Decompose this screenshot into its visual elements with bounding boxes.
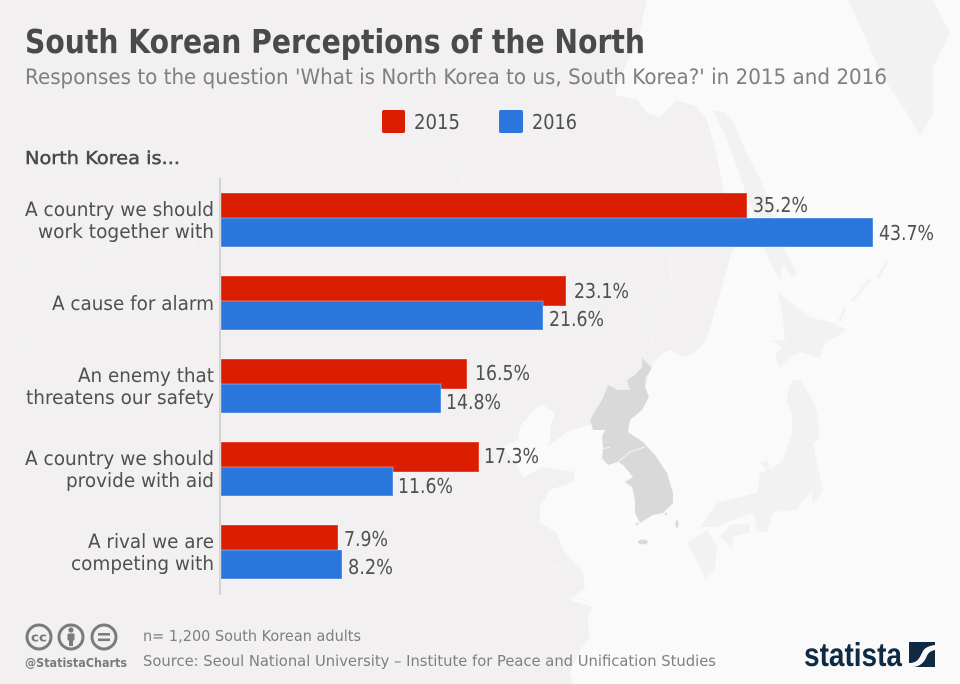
handle: @StatistaCharts <box>25 656 127 670</box>
category label: provide with aid <box>66 469 214 492</box>
chart axis <box>219 178 221 595</box>
logo wordmark: statista <box>804 636 903 673</box>
map: Korean peninsula highlighted <box>590 358 678 544</box>
icon: attribution <box>59 625 83 649</box>
value 2016: 8.2% <box>348 555 393 579</box>
creative commons icons <box>27 625 116 649</box>
bar 2015 <box>221 193 747 223</box>
legend: 2015 label: 2015 <box>414 110 460 134</box>
sample note: n= 1,200 South Korean adults <box>143 627 361 645</box>
value 2015: 7.9% <box>344 527 388 551</box>
axis heading: North Korea is... <box>25 148 180 169</box>
value 2016: 21.6% <box>549 307 604 331</box>
title: South Korean Perceptions of the North <box>25 23 645 61</box>
group: enemy <box>26 359 530 414</box>
group: rival <box>71 525 393 579</box>
category label: A country we should <box>25 447 214 470</box>
icon: no derivatives <box>92 625 116 649</box>
subtitle: Responses to the question 'What is North Korea to us, South Korea?' in 2015 and 2016 <box>25 65 887 90</box>
category label: A cause for alarm <box>52 292 214 315</box>
group: provide aid <box>25 442 539 498</box>
value 2015: 35.2% <box>753 193 808 217</box>
value 2015: 23.1% <box>574 279 629 303</box>
source: Source: Seoul National University – Institute for Peace and Unification Studies <box>143 652 716 670</box>
icon: cc: cc <box>31 630 47 644</box>
category label <box>25 198 214 243</box>
bar 2015 <box>221 276 566 306</box>
group: work together <box>25 193 934 247</box>
bar 2016 <box>221 550 342 579</box>
bar 2015 <box>221 359 467 389</box>
category label <box>25 447 214 492</box>
value 2015: 17.3% <box>484 444 539 468</box>
value 2016: 11.6% <box>398 474 453 498</box>
category label: competing with <box>71 552 214 575</box>
category label: An enemy that <box>78 364 214 387</box>
category label <box>26 364 214 409</box>
bar chart <box>25 178 934 595</box>
bar 2015 <box>221 442 479 472</box>
legend: 2016 label: 2016 <box>532 110 577 134</box>
bar 2016 <box>221 384 441 413</box>
legend: 2016 swatch <box>499 110 523 133</box>
bar 2016 <box>221 218 873 247</box>
category label: A country we should <box>25 198 214 221</box>
bar 2016 <box>221 467 393 496</box>
category label: work together with <box>38 220 214 243</box>
category label: A rival we are <box>88 530 214 553</box>
logo mark <box>909 642 935 667</box>
category label <box>71 530 214 575</box>
category label: threatens our safety <box>26 386 214 409</box>
group: cause for alarm <box>52 276 629 331</box>
statista logo <box>804 636 935 673</box>
legend: 2015 swatch <box>382 110 405 133</box>
value 2016: 14.8% <box>446 390 501 414</box>
bar 2015 <box>221 525 338 555</box>
bar 2016 <box>221 301 543 330</box>
value 2016: 43.7% <box>879 221 934 245</box>
value 2015: 16.5% <box>475 361 530 385</box>
legend <box>382 110 577 134</box>
